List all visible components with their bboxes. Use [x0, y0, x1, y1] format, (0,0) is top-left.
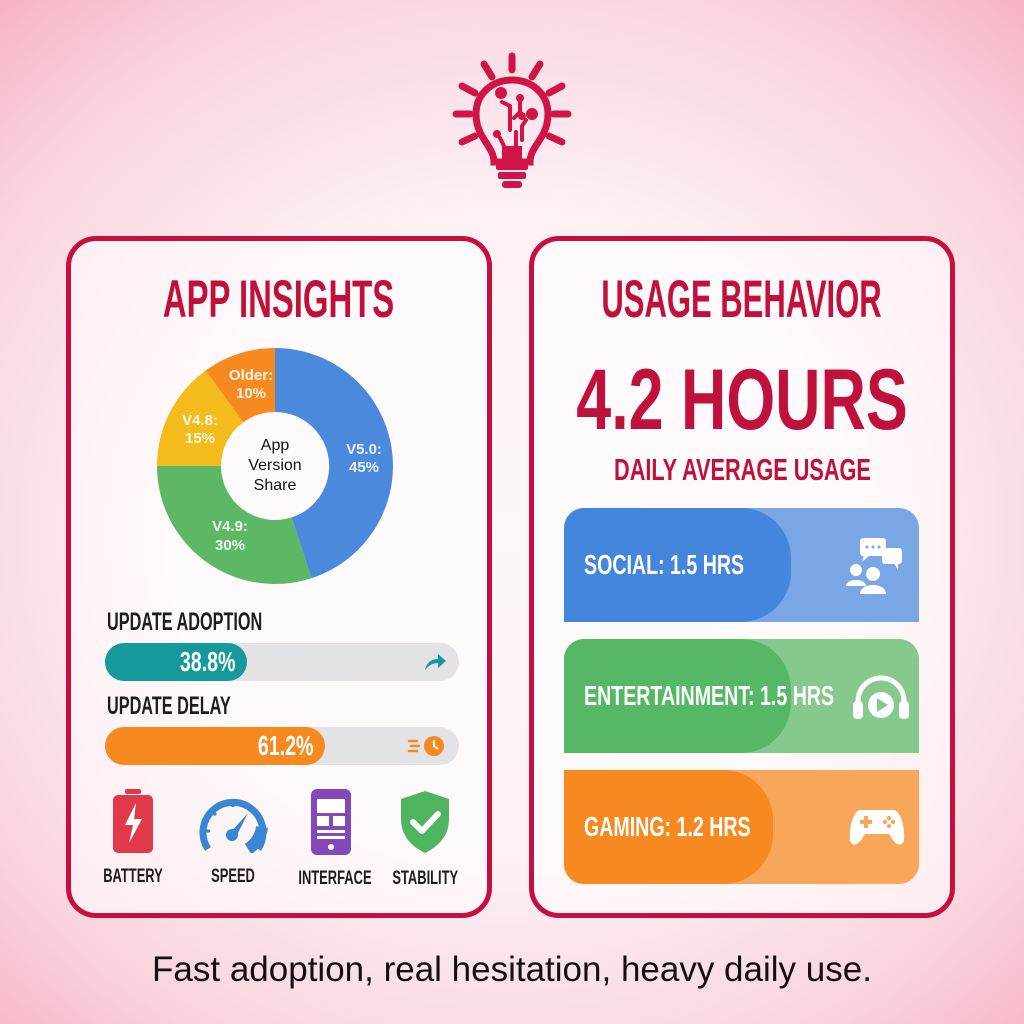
heading: usage behavior: USAGE BEHAVIOR [602, 270, 882, 329]
donut chart: app version share: 10% [236, 385, 266, 402]
bar: entertainment [564, 639, 919, 753]
donut chart: app version share: 15% [185, 430, 215, 447]
donut chart: app version share: 30% [215, 537, 245, 554]
heading: app insights: APP INSIGHTS [163, 270, 395, 329]
bar: social [564, 508, 919, 622]
icon: headphones [853, 676, 909, 719]
icon: interface [298, 789, 372, 889]
label: update adoption: UPDATE ADOPTION [107, 608, 262, 636]
bar: update delay 61.2%: 61.2% [257, 730, 313, 761]
donut chart: app version share: V4.8: [182, 412, 218, 429]
icon: speed [200, 798, 268, 887]
bar: gaming: GAMING: 1.2 HRS [584, 811, 751, 842]
donut chart: app version share [157, 348, 393, 584]
stat: 4.2 hours: 4.2 HOURS [576, 352, 908, 448]
icon: battery [103, 789, 163, 887]
panel: usage behavior [529, 236, 955, 918]
donut chart: app version share: V4.9: [212, 518, 248, 535]
donut chart: app version share: Older: [229, 367, 273, 384]
icon: gamepad [850, 810, 904, 844]
bar: entertainment: ENTERTAINMENT: 1.5 HRS [584, 680, 834, 711]
donut chart: app version share: V5.0: [346, 441, 382, 458]
icon: interface: INTERFACE [298, 868, 372, 889]
caption: Fast adoption, real hesitation, heavy daily use. [152, 950, 872, 989]
bar: update adoption 38.8%: 38.8% [179, 646, 235, 677]
icon: battery: BATTERY [103, 866, 163, 887]
bar: social: SOCIAL: 1.5 HRS [584, 549, 744, 580]
donut chart: app version share: Version [248, 457, 302, 474]
subheading: daily average usage: DAILY AVERAGE USAGE [614, 452, 870, 487]
donut chart: app version share: 45% [349, 459, 379, 476]
bar: update delay 61.2% [105, 727, 459, 765]
icon: lightbulb [452, 52, 572, 188]
bar: update adoption 38.8% [105, 643, 459, 681]
icon: stability [392, 791, 458, 889]
icon: stability: STABILITY [392, 868, 458, 889]
icon: speed: SPEED [211, 866, 255, 887]
panel: app insights [66, 236, 492, 918]
donut chart: app version share: Share [254, 477, 296, 494]
label: update delay: UPDATE DELAY [107, 692, 231, 720]
icon: social chat [846, 538, 902, 594]
bar: gaming [564, 770, 919, 884]
donut chart: app version share: App [261, 437, 289, 454]
